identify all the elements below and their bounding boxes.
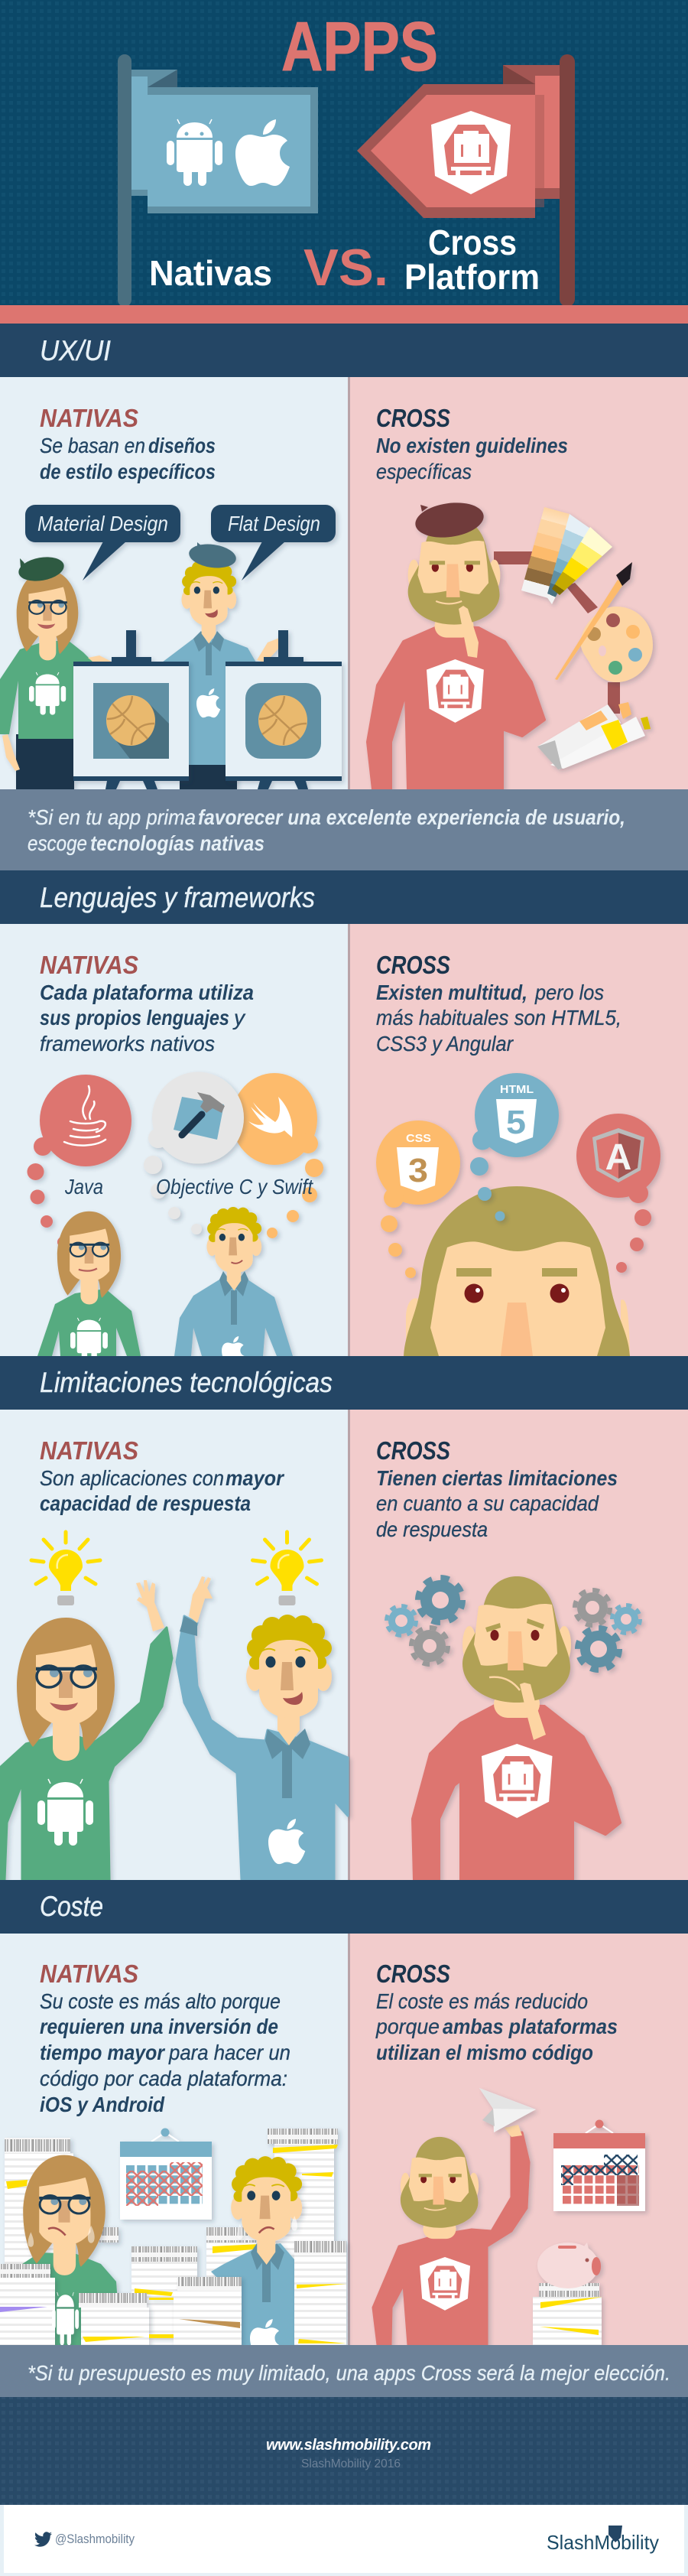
panel divider (348, 1934, 350, 2345)
thought bubble: angular: A (605, 1137, 631, 1178)
section header: Limitaciones tecnológicas (0, 1356, 688, 1410)
section header: UX/UI: UX/UI (40, 335, 111, 366)
easel: material design (73, 630, 189, 789)
label: Cross Platform (404, 223, 540, 297)
text: cross limits: CROSS (376, 1436, 450, 1465)
text: nativas cost (40, 1960, 290, 2116)
icon: palette and brush (555, 562, 653, 682)
character: man stressed (211, 2156, 302, 2356)
icon: paint tubes (537, 702, 651, 769)
thought bubble: java (28, 1075, 131, 1247)
hero background (0, 0, 688, 305)
thought bubble: css3: 3 (408, 1152, 428, 1189)
note: UX (0, 789, 688, 870)
note: UX: tecnologías nativas (90, 831, 264, 855)
panel: nativas limits (0, 1410, 348, 1880)
flag: native (118, 54, 318, 307)
text: cross limits: Tienen ciertas limitaciones (376, 1466, 618, 1490)
text: nativas languages: NATIVAS (40, 951, 138, 979)
text: cross cost: porque (375, 2015, 440, 2038)
icon: gears (387, 1578, 641, 1670)
label: Objective C y Swift: Objective C y Swift (156, 1175, 313, 1199)
text: cross limits (376, 1436, 618, 1541)
calendar: nativas (120, 2128, 212, 2220)
paper stack and piggy bank (533, 2243, 602, 2345)
thought bubble: css3 (376, 1120, 460, 1278)
paper stacks back (5, 2129, 338, 2345)
character: woman designer (0, 554, 116, 789)
text: cross UX: específicas (376, 460, 472, 483)
text: cross languages: pero los (534, 981, 604, 1004)
note: UX: favorecer una excelente experiencia de usuario, (198, 805, 625, 829)
footer white bar (0, 2505, 688, 2576)
text: nativas limits: Son aplicaciones con (40, 1466, 224, 1490)
character: bearded designer (368, 499, 544, 789)
text: cross languages: más habituales son HTML5, (376, 1006, 621, 1029)
text: cross UX: No existen guidelines (376, 434, 568, 457)
text: cross cost: CROSS (376, 1960, 450, 1988)
hero ground band (0, 305, 688, 324)
icon: apple (235, 119, 290, 186)
panel: cross languages (348, 924, 688, 1356)
speech bubble: Flat Design (211, 505, 336, 581)
label: VS.: VS. (303, 239, 388, 297)
note: UX: *Si en tu app prima (28, 805, 196, 829)
note: cost (0, 2345, 688, 2397)
section header: Lenguajes y frameworks (0, 870, 688, 924)
icon: paper plane (479, 2088, 536, 2132)
text: nativas cost: código por cada plataforma: (40, 2067, 287, 2090)
character: man high five (177, 1576, 348, 1880)
text: nativas limits: NATIVAS (40, 1436, 138, 1465)
text: nativas cost: requieren una inversión de (40, 2015, 278, 2038)
text: nativas languages: y (232, 1006, 246, 1029)
text: nativas cost: iOS y Android (40, 2093, 165, 2116)
text: nativas languages: frameworks nativos (40, 1032, 215, 1055)
text: nativas UX: Se basan en (40, 434, 145, 457)
panel divider (348, 377, 350, 789)
text: cross languages: CSS3 y Angular (376, 1032, 514, 1055)
panel divider (348, 1410, 350, 1880)
icon: light bulb left (31, 1532, 100, 1605)
text: nativas cost: NATIVAS (40, 1960, 138, 1988)
thought bubble: angular (576, 1114, 660, 1273)
note: UX: escoge (28, 831, 87, 855)
character: woman thinking (37, 1212, 141, 1362)
character: woman high five (0, 1580, 172, 1880)
text: nativas cost: Su coste es más alto porque (40, 1989, 281, 2013)
text: nativas languages: sus propios lenguajes (40, 1006, 229, 1029)
text: cross limits: en cuanto a su capacidad (376, 1491, 599, 1515)
section header: Coste: Coste (40, 1891, 103, 1922)
speech bubble: Material Design (25, 505, 180, 581)
panel divider (348, 924, 350, 1356)
text: cross cost: ambas plataformas (443, 2015, 618, 2038)
section header: UX/UI (0, 324, 688, 377)
text: cross languages (376, 951, 621, 1055)
speech bubble: Flat Design: Flat Design (228, 512, 320, 535)
panel: cross limits (348, 1410, 688, 1880)
thought bubble: html5: 5 (506, 1104, 526, 1141)
footer credit: SlashMobility 2016 (301, 2457, 401, 2470)
icon: colour fan (521, 507, 612, 604)
text: nativas UX: NATIVAS (40, 404, 138, 432)
section header: Limitaciones tecnológicas: Limitaciones tecnológicas (40, 1367, 333, 1398)
thought bubble: html5: HTML (500, 1083, 534, 1096)
text: nativas limits: mayor (226, 1466, 285, 1490)
logo: SlashMobility: SlashMobility (547, 2531, 659, 2554)
character: man thinking (174, 1207, 293, 1364)
text: nativas UX (40, 404, 216, 483)
text: cross cost: El coste es más reducido (376, 1989, 588, 2013)
character: bearded cheerful (373, 2125, 529, 2345)
section header: Coste (0, 1880, 688, 1934)
panel: nativas languages (0, 924, 348, 1356)
panel: cross cost (348, 1934, 688, 2345)
icon: light bulb right (252, 1532, 321, 1605)
panel: nativas cost (0, 1934, 348, 2345)
text: nativas cost: para hacer un (168, 2041, 290, 2064)
twitter handle: @Slashmobility (55, 2532, 135, 2546)
text: cross UX: CROSS (376, 404, 450, 432)
text: nativas UX: diseños (148, 434, 216, 457)
text: nativas languages (40, 951, 254, 1055)
icon: twitter (34, 2532, 52, 2547)
character: bearded thinking (413, 1576, 620, 1880)
label: Cross Platform: Cross (428, 223, 517, 262)
calendar: cross (553, 2120, 645, 2211)
thought bubble: css3: CSS (406, 1132, 431, 1145)
text: nativas limits: capacidad de respuesta (40, 1491, 251, 1515)
label: Java: Java (64, 1175, 103, 1199)
text: nativas languages: Cada plataforma utiliza (40, 981, 254, 1004)
thought bubble: objective c (144, 1072, 244, 1234)
character: woman stressed (15, 2155, 121, 2345)
text: nativas cost: tiempo mayor (40, 2041, 166, 2064)
text: nativas UX: de estilo específicos (40, 460, 216, 483)
thought bubble: html5 (470, 1073, 559, 1221)
panel: cross UX (348, 377, 688, 789)
footer band (0, 2397, 688, 2505)
text: cross languages: CROSS (376, 951, 450, 979)
character: man designer (162, 542, 283, 789)
text: nativas limits (40, 1436, 285, 1515)
icon: cross platform shield (431, 111, 511, 194)
thought bubble: swift (232, 1073, 323, 1238)
art connectors (494, 551, 620, 714)
label: Nativas: Nativas (149, 253, 272, 293)
paper stacks front (0, 2241, 346, 2346)
speech bubble: Material Design: Material Design (37, 512, 168, 535)
section header: Lenguajes y frameworks: Lenguajes y frameworks (40, 882, 315, 913)
icon: android (167, 119, 222, 186)
easel: flat design (226, 630, 342, 789)
title: APPS (281, 8, 438, 86)
text: cross languages: Existen multitud, (376, 981, 527, 1004)
panel: nativas UX (0, 377, 348, 789)
label: Cross Platform: Platform (404, 257, 540, 297)
text: cross cost (375, 1960, 618, 2064)
flag: cross platform (357, 54, 575, 307)
character: big head cross (404, 1186, 630, 1356)
text: cross UX (376, 404, 568, 483)
footer url: www.slashmobility.com (266, 2437, 431, 2454)
text: cross cost: utilizan el mismo código (376, 2041, 593, 2064)
text: cross limits: de respuesta (376, 1517, 488, 1541)
